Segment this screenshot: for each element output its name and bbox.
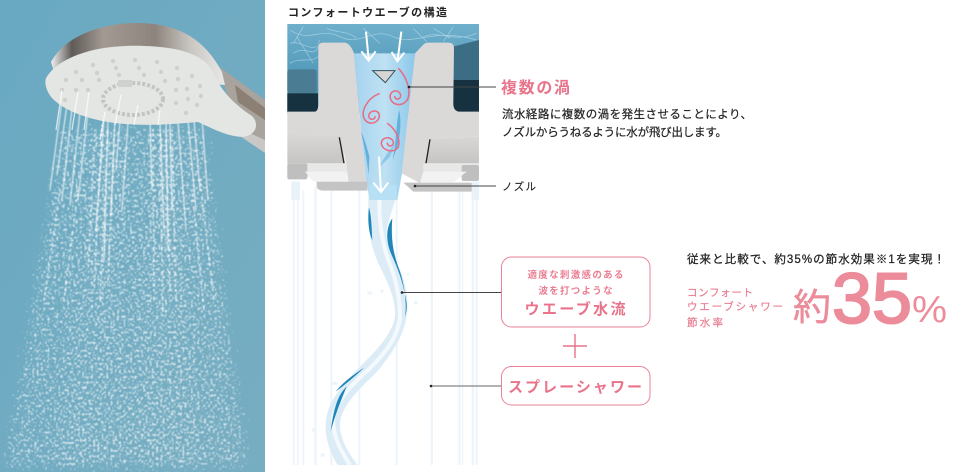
text: vortex description: ノズルからうねるように水が飛び出します。 — [502, 125, 727, 139]
lower grey blocks — [287, 135, 345, 163]
text: comfort wave shower label: コンフォート — [687, 287, 753, 299]
nozzle plate — [287, 163, 479, 192]
metal rim — [51, 23, 225, 85]
white arrows — [361, 32, 404, 192]
grey right body — [402, 43, 479, 184]
stat: about 35 percent — [793, 260, 947, 339]
white face — [45, 46, 256, 137]
callout: wave flow: 波を打つような — [538, 285, 613, 297]
text: vortex description — [502, 107, 752, 139]
stat: about 35 percent: 35 — [832, 260, 912, 339]
text: vortex description: 流水経路に複数の渦を発生させることにより、 — [502, 107, 752, 121]
photo: shower head spraying water — [0, 0, 265, 472]
text: water saving claim: 従来と比較で、約35%の節水効果※1を実現！ — [687, 252, 945, 266]
centre nozzle ring — [103, 83, 163, 115]
stat: about 35 percent: % — [912, 289, 947, 331]
grey left body — [287, 43, 366, 182]
text: comfort wave shower label: ウエーブシャワー — [687, 300, 783, 313]
callout: wave flow — [502, 257, 650, 327]
spray lines — [293, 187, 478, 465]
leader: swirl — [408, 86, 496, 88]
water ribbon and spray lines — [293, 187, 478, 465]
falling water streams — [44, 100, 214, 320]
text: comfort wave shower label — [687, 287, 783, 329]
nozzles — [60, 58, 203, 115]
diagram: cross-section of the nozzle — [287, 24, 479, 200]
handle — [218, 66, 265, 152]
pink swirl arrows — [363, 69, 409, 151]
leader: wave flow — [401, 291, 501, 294]
dark streaks — [331, 207, 407, 432]
leader: spray — [430, 385, 501, 387]
stat: about 35 percent: 約 — [793, 287, 831, 328]
dark side blocks — [287, 69, 317, 93]
callout: wave flow: 適度な刺激感のある — [528, 269, 624, 281]
callout: wave flow: ウエーブ水流 — [524, 300, 626, 318]
water tank background — [287, 24, 479, 114]
text: comfort wave shower label: 節水率 — [687, 316, 723, 329]
rays start — [291, 182, 300, 200]
water droplets — [0, 125, 252, 472]
leader: nozzle — [414, 185, 496, 187]
water channel — [354, 53, 415, 200]
heading: multiple vortices: 複数の渦 — [501, 78, 570, 97]
callout: spray shower — [502, 366, 650, 405]
callout: spray shower: スプレーシャワー — [508, 379, 642, 396]
heading: structure title: コンフォートウエーブの構造 — [288, 5, 447, 19]
icon: plus — [563, 334, 587, 358]
triangle baffle — [373, 71, 395, 83]
ribbon — [326, 187, 407, 465]
label: nozzle: ノズル — [502, 180, 536, 193]
spray lines over head — [56, 90, 160, 140]
